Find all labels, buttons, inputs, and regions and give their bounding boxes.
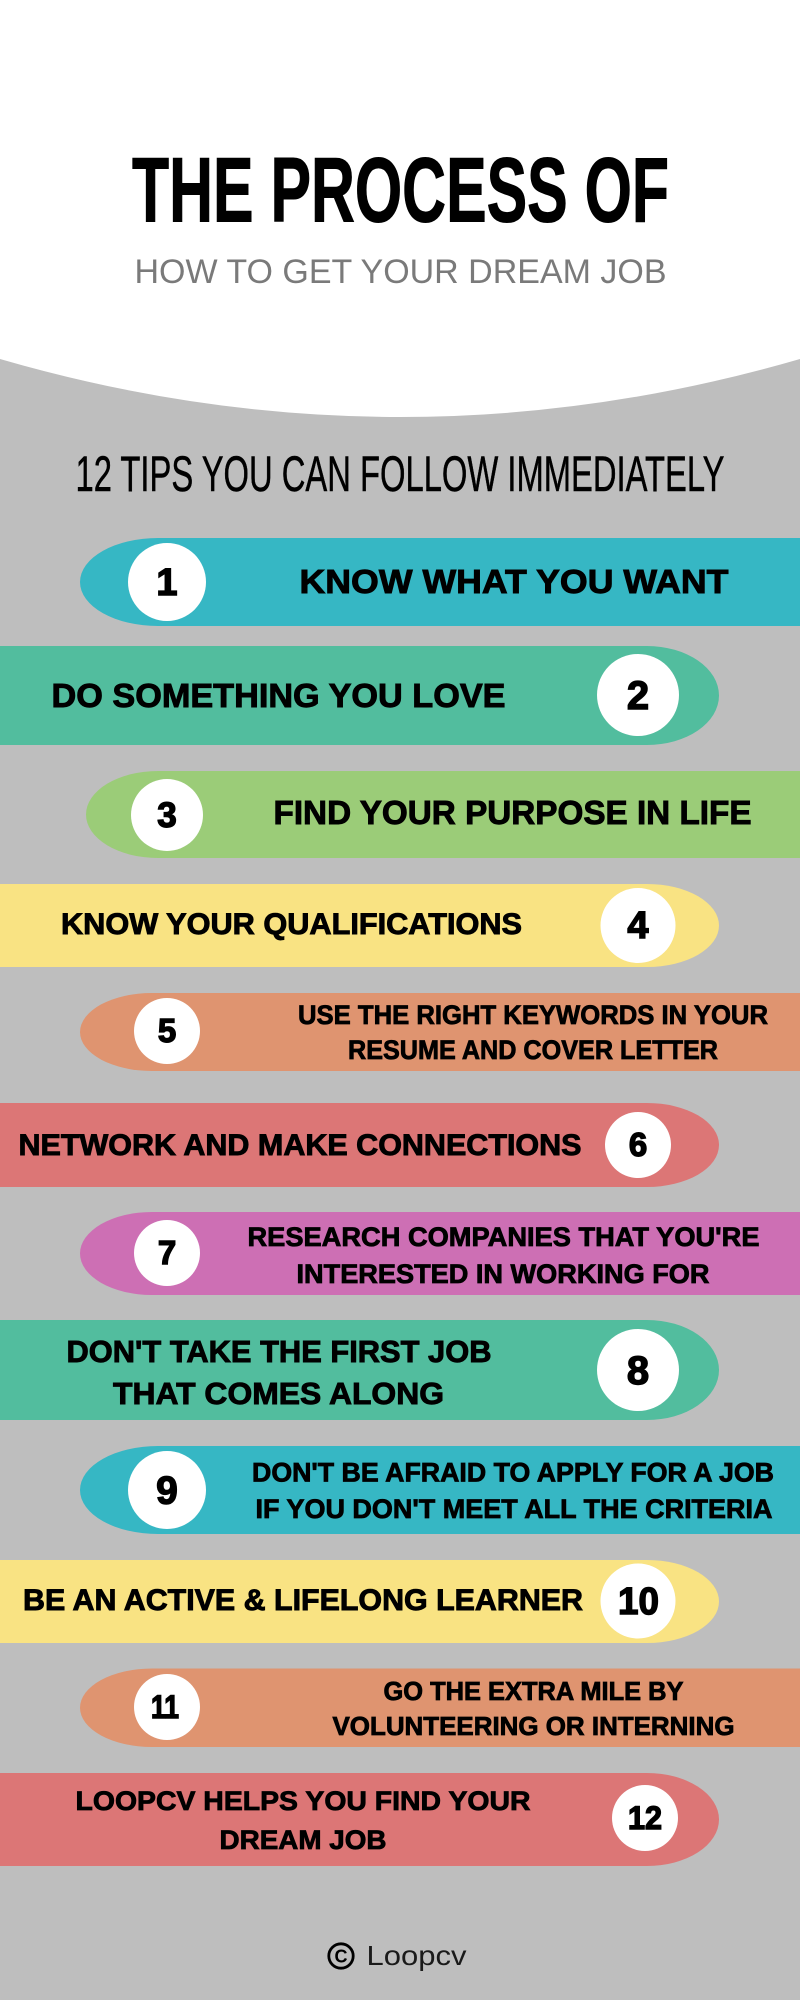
tip 5 (80, 993, 800, 1071)
tip 6: NETWORK AND MAKE CONNECTIONS (18, 1129, 582, 1162)
tip 10 (0, 1560, 719, 1643)
tip 5: USE THE RIGHT KEYWORDS IN YOUR (298, 1000, 768, 1030)
tip 2: 2 (627, 674, 649, 718)
tip 3: FIND YOUR PURPOSE IN LIFE (274, 794, 752, 831)
tip 11: GO THE EXTRA MILE BY (384, 1678, 684, 1706)
tip 5: 5 (158, 1012, 176, 1049)
tip 4: 4 (627, 905, 649, 947)
tip 8: 8 (627, 1349, 649, 1393)
tip 7 (80, 1212, 800, 1295)
tip 10: BE AN ACTIVE & LIFELONG LEARNER (23, 1584, 583, 1617)
tip 4 (0, 884, 719, 967)
tip 6 (0, 1103, 719, 1187)
tip 8 (0, 1320, 719, 1420)
tip 1: 1 (156, 562, 178, 604)
tip 2: DO SOMETHING YOU LOVE (52, 677, 506, 714)
tip 7: 7 (158, 1234, 176, 1271)
tip 2 (0, 646, 719, 745)
tip 6: 6 (629, 1126, 647, 1163)
tip 12 (0, 1773, 719, 1866)
tip 1 (80, 538, 800, 626)
tip 12: 12 (628, 1800, 662, 1836)
tip 11: 11 (151, 1689, 179, 1725)
tip 4: KNOW YOUR QUALIFICATIONS (61, 908, 522, 941)
subtitle: HOW TO GET YOUR DREAM JOB (134, 253, 666, 291)
footer logo (329, 1940, 466, 1971)
white curved header (0, 0, 800, 417)
tip 7: RESEARCH COMPANIES THAT YOU'RE (248, 1222, 760, 1252)
tip 1: KNOW WHAT YOU WANT (300, 563, 728, 600)
tip 10: 10 (618, 1581, 659, 1623)
tip 12: DREAM JOB (220, 1825, 386, 1855)
tip 11: VOLUNTEERING OR INTERNING (332, 1713, 734, 1741)
tip 9: 9 (156, 1470, 178, 1512)
footer logo: C (334, 1946, 348, 1966)
tip 7: INTERESTED IN WORKING FOR (296, 1259, 710, 1289)
tip 5: RESUME AND COVER LETTER (348, 1035, 718, 1065)
tip 9 (80, 1446, 800, 1534)
tip 3 (86, 771, 800, 858)
footer logo: Loopcv (366, 1940, 466, 1971)
tip 9: DON'T BE AFRAID TO APPLY FOR A JOB (252, 1458, 774, 1488)
tip 3: 3 (157, 796, 177, 835)
tip 11 (80, 1668, 800, 1747)
tip 9: IF YOU DON'T MEET ALL THE CRITERIA (256, 1494, 772, 1524)
tip 12: LOOPCV HELPS YOU FIND YOUR (76, 1786, 530, 1816)
tip 8: DON'T TAKE THE FIRST JOB (66, 1334, 492, 1369)
tip 8: THAT COMES ALONG (113, 1376, 444, 1411)
